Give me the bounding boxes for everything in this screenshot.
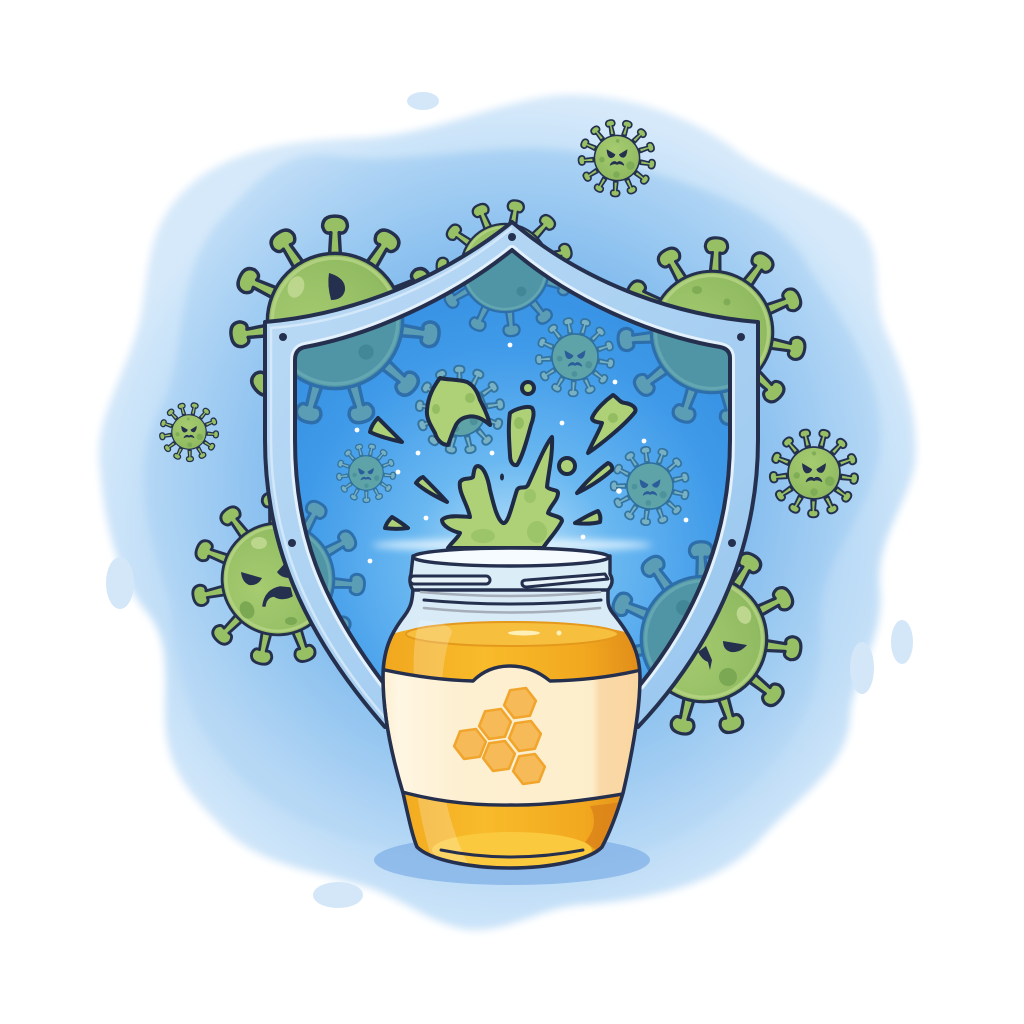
jar lid — [410, 556, 612, 590]
face and markings — [237, 537, 297, 625]
glass body — [383, 590, 640, 868]
virus: right lower — [603, 538, 805, 739]
small virus inside: left — [336, 443, 396, 504]
piece markings — [432, 393, 618, 429]
honey and label — [384, 621, 638, 866]
jar outline — [383, 590, 640, 868]
shield inner glow edge — [295, 250, 730, 685]
virus: left lower — [185, 486, 371, 671]
tall shard — [509, 407, 534, 465]
triangle shard 2 — [416, 477, 447, 502]
shield highlight — [271, 228, 512, 718]
droplets — [522, 382, 575, 474]
jar shadow — [374, 835, 650, 885]
face and markings — [698, 604, 754, 686]
virus being broken — [414, 364, 505, 454]
shield frame — [265, 222, 758, 727]
small virus: right — [764, 423, 864, 523]
tiny droplet — [500, 474, 504, 480]
glass reflection — [414, 624, 468, 863]
small virus: left — [157, 400, 221, 464]
jar base line — [441, 850, 583, 857]
sparkles — [355, 343, 688, 563]
shield — [263, 220, 760, 729]
virus: top right large — [612, 233, 812, 431]
light glow at jar opening — [372, 539, 652, 551]
lid rim — [413, 548, 609, 566]
triangle shard 5 — [575, 511, 600, 524]
triangle shard 3 — [385, 517, 408, 529]
honey glow — [432, 832, 592, 868]
small virus: top right — [572, 113, 662, 203]
shield rivets — [279, 233, 745, 547]
small virus inside: right — [610, 446, 690, 526]
floating droplets — [106, 92, 913, 908]
splash and shards — [370, 378, 635, 548]
virus: top center — [425, 189, 585, 347]
dimmed viruses inside shield — [293, 230, 732, 870]
honeycomb logo — [452, 687, 547, 785]
triangle shard 1 — [370, 418, 402, 442]
honey surface — [406, 622, 618, 646]
large broken piece — [427, 378, 490, 445]
splash tone — [471, 489, 547, 543]
viruses behind shield — [185, 189, 812, 739]
shield inner outline — [295, 250, 730, 685]
lid right slot — [522, 574, 608, 587]
honey jar — [370, 548, 655, 873]
main splash — [442, 437, 562, 548]
lid left slot — [410, 576, 490, 584]
triangle shard 4 — [577, 463, 612, 493]
honey fill — [385, 621, 638, 856]
right shard — [588, 395, 635, 453]
label — [380, 666, 645, 805]
neck threads — [421, 592, 601, 612]
shield interior — [297, 253, 728, 680]
virus: top left large — [229, 216, 441, 425]
small virus inside: upper — [534, 317, 615, 398]
orange edge shade — [585, 802, 618, 850]
watercolor background blob — [99, 95, 916, 930]
